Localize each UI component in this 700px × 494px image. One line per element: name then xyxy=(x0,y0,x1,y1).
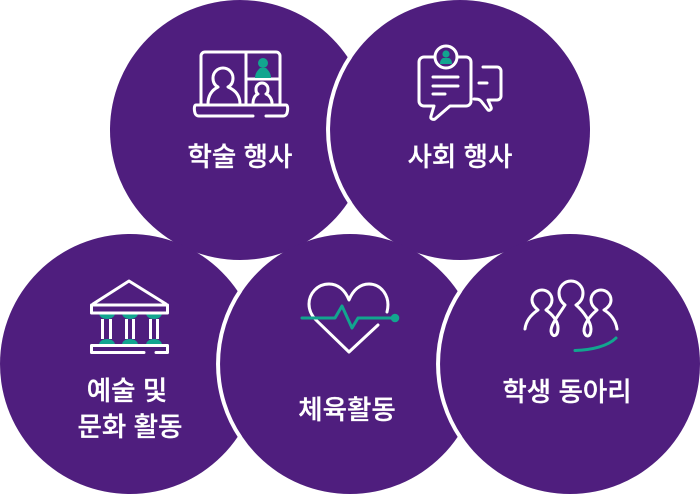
circle: social events xyxy=(330,0,590,260)
white ring: social events edge xyxy=(328,56,351,204)
icon: chat bubbles with profile xyxy=(419,46,501,119)
icon: group of people xyxy=(525,281,617,350)
white ring: sports edge xyxy=(218,290,241,438)
label: arts and culture: 예술 및 xyxy=(87,376,167,406)
circle: student clubs xyxy=(440,234,700,494)
icon: heart with pulse xyxy=(302,284,399,352)
label: sports: 체육활동 xyxy=(298,395,396,425)
circle: sports xyxy=(220,234,480,494)
label: social events: 사회 행사 xyxy=(408,142,512,172)
label: student clubs: 학생 동아리 xyxy=(502,377,632,407)
icon: classical building xyxy=(92,281,168,352)
label: arts and culture second line: 문화 활동 xyxy=(78,412,182,442)
label: academic events: 학술 행사 xyxy=(188,142,292,172)
circle: arts and culture xyxy=(0,234,260,494)
circle: academic events xyxy=(110,0,370,260)
white ring: student clubs edge xyxy=(438,290,461,438)
icon: video conference laptop xyxy=(194,52,288,116)
